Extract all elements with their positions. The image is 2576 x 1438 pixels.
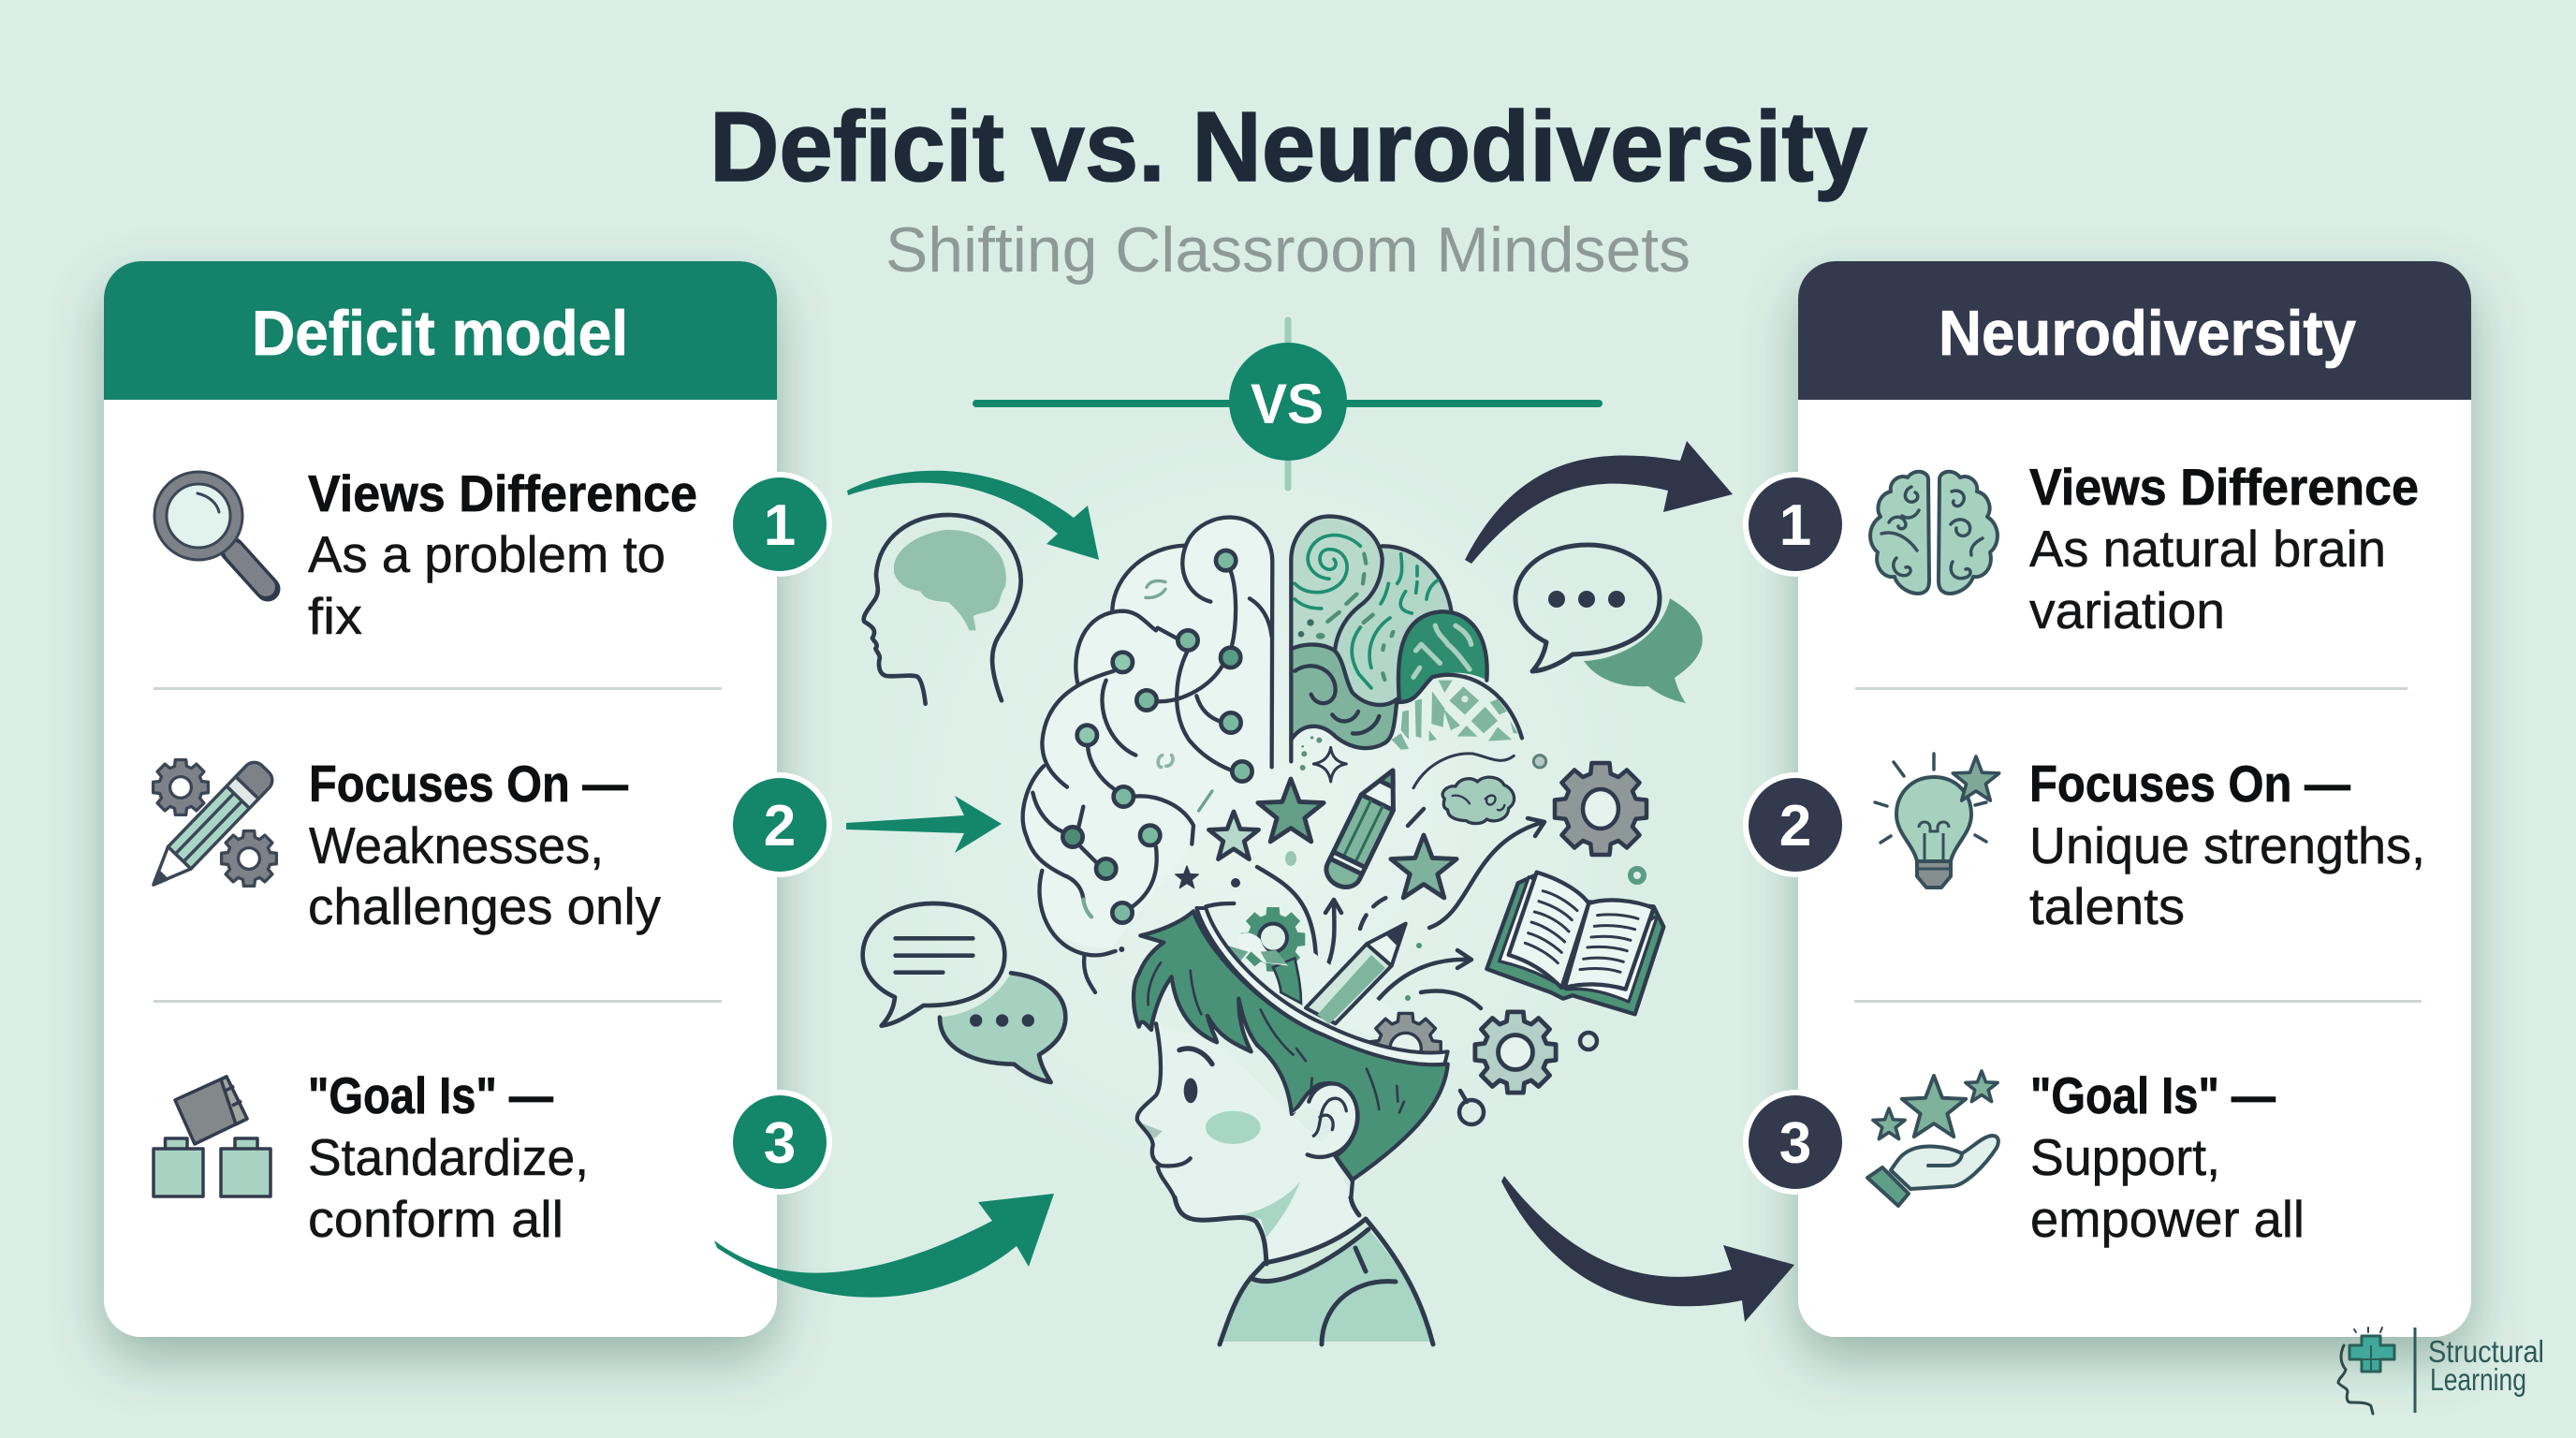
number badge: right 1: 1 [1779, 493, 1811, 558]
text: focuses on [308, 755, 661, 935]
icon: pencil and gears [142, 757, 277, 896]
neck outline [1175, 1197, 1359, 1264]
logo: structural learning [2338, 1328, 2544, 1414]
ear [1292, 1083, 1357, 1157]
number badge: right 1 [1743, 472, 1848, 577]
text: views difference [308, 464, 697, 645]
floating ideas: stars [1176, 779, 1456, 898]
panel: neurodiversity [1798, 261, 2471, 1337]
arrow: green bottom [714, 1194, 1054, 1298]
number badge: right 3 [1743, 1090, 1848, 1195]
illustration: right brain patterns [1291, 517, 1546, 824]
icon: magnifying glass [154, 472, 268, 589]
title: Deficit vs. Neurodiversity [710, 92, 1867, 202]
panel header: neurodiversity [1798, 261, 2471, 400]
text: focuses on: talents [2029, 877, 2185, 935]
icon: speech bubbles right [1515, 545, 1703, 703]
shirt [1220, 1219, 1433, 1344]
small brain [1442, 777, 1515, 824]
illustration: boy with open head [1134, 902, 1448, 1344]
floating ideas: pencil [1321, 763, 1409, 893]
text: focuses on: challenges only [308, 877, 661, 935]
text: goal is: "Goal Is" — [2030, 1066, 2276, 1124]
heading: deficit model: Deficit model [252, 298, 628, 369]
text: views difference [2029, 458, 2419, 639]
number badge: left 1: 1 [764, 493, 796, 558]
number badge: right 2: 2 [1779, 794, 1811, 858]
sparkle [1313, 747, 1346, 782]
arrow: green middle [846, 796, 1002, 853]
number badge: left 2: 2 [764, 794, 796, 858]
number badge: left 2 [727, 772, 832, 877]
logo: structural learning: Learning [2430, 1362, 2526, 1397]
text: views difference: fix [308, 587, 362, 645]
lower lobe [1291, 645, 1398, 748]
number badge: left 3 [727, 1090, 832, 1195]
icon: brain [1870, 472, 1998, 594]
text: focuses on [2029, 755, 2425, 935]
heading: neurodiversity: Neurodiversity [1939, 298, 2356, 369]
icon: hand with stars [1867, 1071, 1998, 1206]
hair [1134, 911, 1448, 1180]
text: goal is: empower all [2030, 1190, 2305, 1248]
hair strands [1148, 962, 1404, 1112]
text: views difference: Views Difference [308, 464, 697, 522]
face [1137, 1023, 1351, 1198]
text: goal is: conform all [308, 1190, 564, 1248]
text: views difference: variation [2029, 581, 2225, 639]
lattice lobe [1392, 681, 1518, 750]
floating ideas: book [1486, 873, 1663, 1014]
rim of open head [1196, 908, 1448, 1064]
icon: speech bubbles left [863, 903, 1065, 1082]
text: goal is: Standardize, [308, 1128, 589, 1186]
text: focuses on: Focuses On — [309, 755, 628, 813]
arrow: dark top [1465, 441, 1733, 564]
text: goal is [308, 1066, 589, 1248]
arrow: dark bottom [1501, 1176, 1794, 1322]
dashed lobe [1335, 546, 1452, 705]
number badge: left 3: 3 [764, 1111, 796, 1176]
face outline [1137, 1023, 1191, 1198]
text: views difference: As natural brain [2029, 520, 2386, 578]
icon: head silhouette with brain [864, 515, 1021, 704]
illustration: left brain network [1022, 518, 1272, 992]
vs divider: VS [1251, 373, 1324, 435]
text: goal is: Support, [2030, 1128, 2220, 1186]
number badge: right 3: 3 [1779, 1111, 1811, 1176]
neck shadow [1237, 1181, 1300, 1238]
icon: light bulb with star [1875, 754, 1999, 888]
head gear [1241, 907, 1305, 972]
icon: standard blocks [154, 1077, 271, 1196]
neck fill [1175, 1197, 1366, 1264]
text: focuses on: Focuses On — [2029, 755, 2350, 813]
text: views difference: Views Difference [2029, 458, 2419, 516]
text: goal is [2030, 1066, 2305, 1248]
floating ideas: curved arrows and dots [1257, 809, 1644, 1124]
text: focuses on: Weaknesses, [309, 816, 604, 874]
floating ideas: large gear [1555, 763, 1647, 855]
text: goal is: "Goal Is" — [308, 1066, 553, 1124]
panel header: deficit model [104, 261, 777, 400]
head pencil [1306, 924, 1406, 1024]
floating ideas: small gear [1475, 1012, 1556, 1093]
vs divider [976, 320, 1599, 488]
text: focuses on: Unique strengths, [2029, 816, 2425, 874]
text: views difference: As a problem to [308, 525, 666, 583]
green lobe [1398, 611, 1487, 702]
open head contents [1198, 902, 1444, 1049]
cheek [1206, 1111, 1261, 1144]
spiral lobe [1291, 517, 1383, 651]
panel: deficit model [104, 261, 777, 1337]
number badge: left 1 [727, 472, 832, 577]
number badge: right 2 [1743, 772, 1848, 877]
arrow: green top [847, 471, 1099, 560]
subtitle: Shifting Classroom Mindsets [886, 214, 1690, 286]
head grey gear [1370, 1013, 1441, 1084]
logo: structural learning: Structural [2428, 1334, 2544, 1369]
eye [1184, 1078, 1197, 1103]
